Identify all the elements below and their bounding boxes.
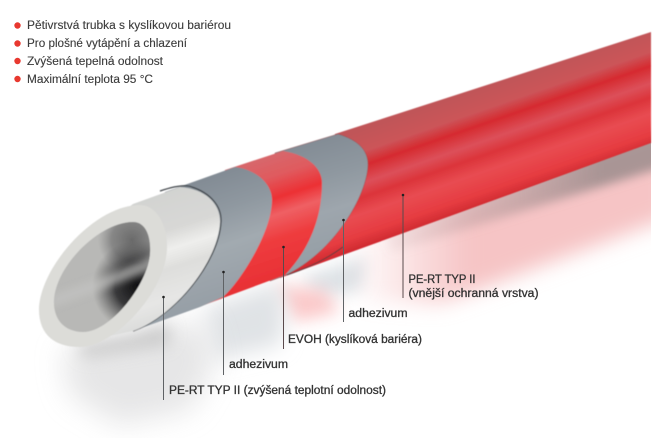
layer: EVOH red barrier [196,151,322,308]
callout: EVOH: EVOH (kyslíková bariéra) [288,334,422,346]
callout: outer adhesive [342,219,408,322]
callout: EVOH [282,246,422,349]
edge line: inner adhesive [133,186,221,331]
bullet 3: Zvýšená tepelná odolnost [27,56,164,68]
callout: inner adhesive [222,271,288,375]
layer: outer adhesive grey [270,134,368,281]
pipe cutaway [39,32,651,347]
bullet 1: Pětivrstvá trubka s kyslíkovou bariérou [27,20,231,32]
layer: inner adhesive grey [125,167,272,331]
callout: PE-RT core: PE-RT TYP II (zvýšená teplotní odolnost) [169,385,386,397]
pipe interior [54,222,151,332]
bullet 4: Maximální teplota 95 °C [27,74,153,86]
edge line: lower outer adhesive [287,247,343,275]
callout: outer PE-RT: (vnější ochranná vrstva) [408,288,539,300]
layer: white PE-RT core [110,187,220,336]
layer: outer PE-RT red jacket [280,32,651,278]
pipe end ring [39,205,167,347]
floor shadow and reflections [62,125,657,425]
callout: outer PE-RT [402,194,539,300]
feature list [14,20,231,86]
callout: outer PE-RT: PE-RT TYP II [408,274,476,286]
callout: inner adhesive: adhezivum [229,359,288,371]
bullet 2: Pro plošné vytápění a chlazení [27,38,188,50]
callout: outer adhesive: adhezivum [348,308,408,320]
